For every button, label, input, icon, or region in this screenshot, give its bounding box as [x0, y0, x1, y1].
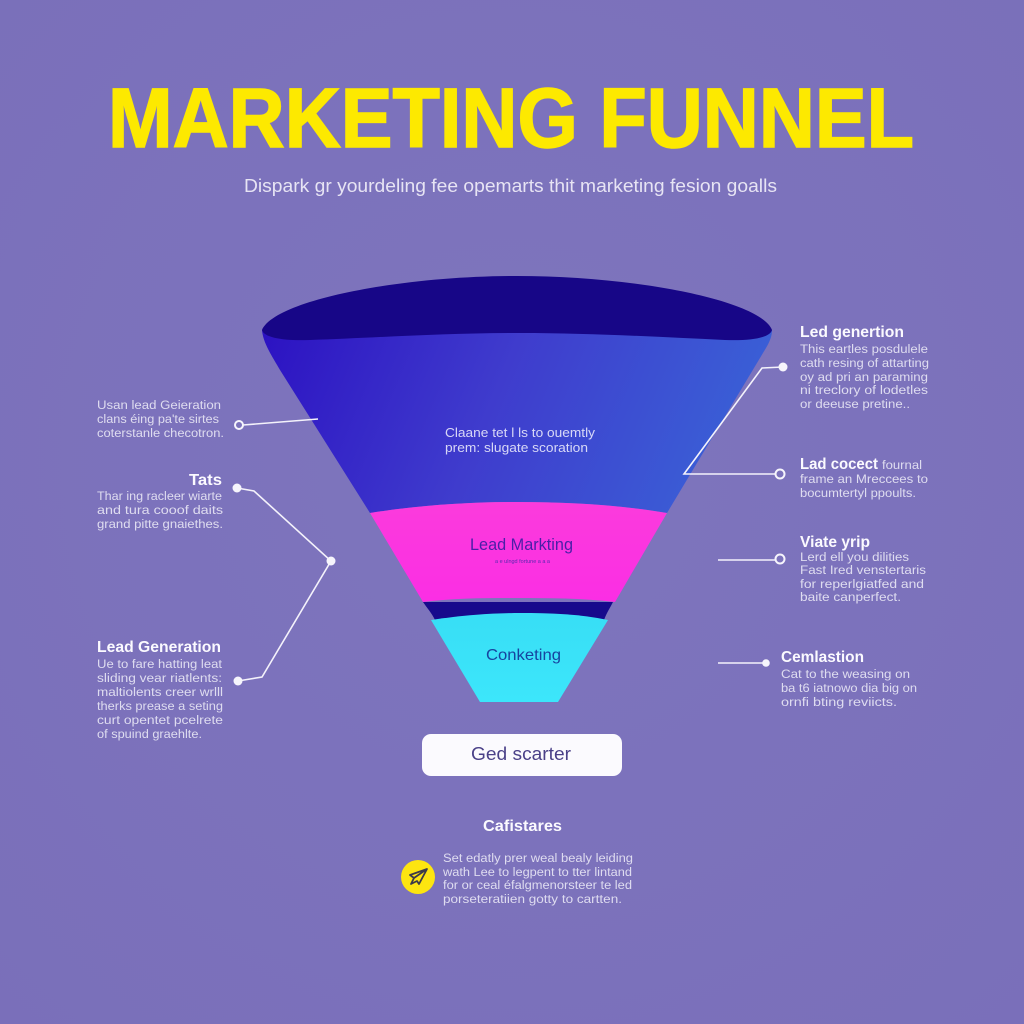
- funnel rim: [262, 276, 772, 340]
- middle section small caption: a e ulngd fortune a a a: [495, 559, 550, 565]
- left note: tats: Thar ing racleer wiarte: [97, 489, 222, 503]
- right note: lad cocect: Lad cocect: [800, 456, 878, 473]
- top section label: [445, 426, 596, 455]
- bottom heading: Cafistares: [483, 818, 562, 835]
- funnel middle section: [370, 502, 667, 602]
- right note: viate yrip: Lerd ell you dilities: [800, 550, 909, 564]
- right note: led generation: or deeuse pretine..: [800, 397, 910, 411]
- top section label: prem: slugate scoration: [445, 441, 588, 455]
- left note: tats: Tats: [189, 472, 222, 489]
- left note: lead generation: curt opentet pcelrete: [97, 713, 223, 727]
- left note: lead generation: Ue to fare hatting leat: [97, 657, 223, 671]
- right note: led generation: This eartles posdulele: [800, 342, 928, 356]
- connector: led generation and lad cocect: [684, 362, 788, 478]
- left note: usan lead generation: [97, 398, 224, 440]
- button: [422, 734, 622, 776]
- left note: lead generation: Lead Generation: [97, 639, 221, 656]
- top section label: Claane tet l ls to ouemtly: [445, 426, 596, 440]
- right note: cemlastion: Cemlastion: [781, 649, 864, 666]
- funnel dark band: [423, 602, 613, 620]
- right note: led generation: Led genertion: [800, 324, 904, 341]
- right note: led generation: [800, 324, 929, 411]
- funnel bottom section: [431, 613, 608, 702]
- connector: cemlastion: [718, 659, 770, 667]
- right note: lad cocect: frame an Mreccees to: [800, 472, 928, 486]
- bottom text block: porseteratiien gotty to cartten.: [443, 892, 622, 906]
- left note: tats: grand pitte gnaiethes.: [97, 517, 223, 531]
- left note: tats: [97, 472, 223, 531]
- right note: viate yrip: Fast Ired venstertaris: [800, 563, 926, 577]
- left note: usan lead generation: clans éing pa'te sirtes: [97, 412, 219, 426]
- right note: lad cocect: [800, 456, 928, 500]
- right note: cemlastion: Cat to the weasing on: [781, 667, 910, 681]
- right note: viate yrip: for reperlgiatfed and: [800, 577, 924, 591]
- left note: lead generation: sliding vear riatlents:: [97, 671, 222, 685]
- bottom text block: for or ceal éfalgmenorsteer te led: [443, 878, 632, 892]
- left note: lead generation: therks prease a seting: [97, 699, 223, 713]
- left note: usan lead generation: Usan lead Geieration: [97, 398, 221, 412]
- funnel top section: [262, 330, 772, 513]
- right note: led generation: oy ad pri an paraming: [800, 370, 928, 384]
- left note: lead generation: [97, 639, 223, 741]
- right note: cemlastion: ba t6 iatnowo dia big on: [781, 681, 917, 695]
- bottom text block: Set edatly prer weal bealy leiding: [443, 851, 633, 865]
- left note: lead generation: of spuind graehlte.: [97, 727, 202, 741]
- right note: led generation: ni treclory of lodetles: [800, 383, 928, 397]
- connector: viate yrip: [718, 554, 784, 564]
- bottom text block: [442, 851, 633, 906]
- right note: lad cocect: fournal: [882, 458, 922, 472]
- right note: led generation: cath resing of attarting: [800, 356, 929, 370]
- right note: cemlastion: ornfi bting reviicts.: [781, 695, 897, 709]
- icon: rocket badge: [401, 860, 435, 894]
- left note: lead generation: maltiolents creer wrlll: [97, 685, 223, 699]
- bottom text block: wath Lee to legpent to tter lintand: [442, 865, 632, 879]
- right note: cemlastion: [781, 649, 917, 709]
- connector: tats and lead generation: [232, 484, 336, 686]
- right note: viate yrip: baite canperfect.: [800, 590, 901, 604]
- middle section label: Lead Markting: [470, 536, 573, 554]
- funnel diagram: [262, 276, 772, 702]
- bottom section label: Conketing: [486, 647, 561, 664]
- subtitle: Dispark gr yourdeling fee opemarts thit marketing fesion goalls: [244, 176, 777, 196]
- left note: usan lead generation: coterstanle checotron.: [97, 426, 224, 440]
- right note: viate yrip: Viate yrip: [800, 534, 870, 551]
- left note: tats: and tura cooof daits: [97, 503, 223, 517]
- button: Ged scarter: [471, 744, 571, 764]
- title: MARKETING FUNNEL: [108, 71, 914, 165]
- right note: lad cocect: bocumtertyl ppoults.: [800, 486, 916, 500]
- connector: usan lead generation: [235, 419, 318, 429]
- right note: viate yrip: [800, 534, 926, 604]
